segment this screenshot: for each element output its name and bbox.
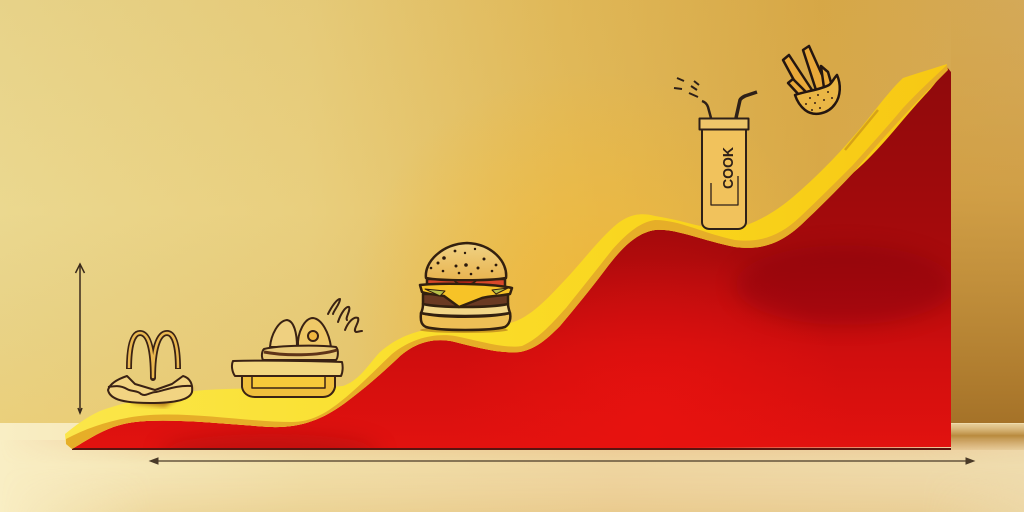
yellow ribbon surface: [65, 64, 948, 449]
icon: fries and nugget: [783, 46, 840, 114]
icon: basket with buns: [232, 318, 343, 397]
red curve body: [72, 68, 951, 450]
icon: drink cup with straws: [674, 78, 757, 229]
cup label: COOK: [720, 147, 737, 189]
icon: motion squiggles: [328, 299, 362, 332]
horizontal axis arrow: [150, 458, 974, 464]
icon: arches on bowl: [108, 333, 195, 407]
vertical axis arrow: [76, 264, 84, 413]
floor: [0, 423, 1024, 512]
icon: burger: [420, 243, 512, 333]
